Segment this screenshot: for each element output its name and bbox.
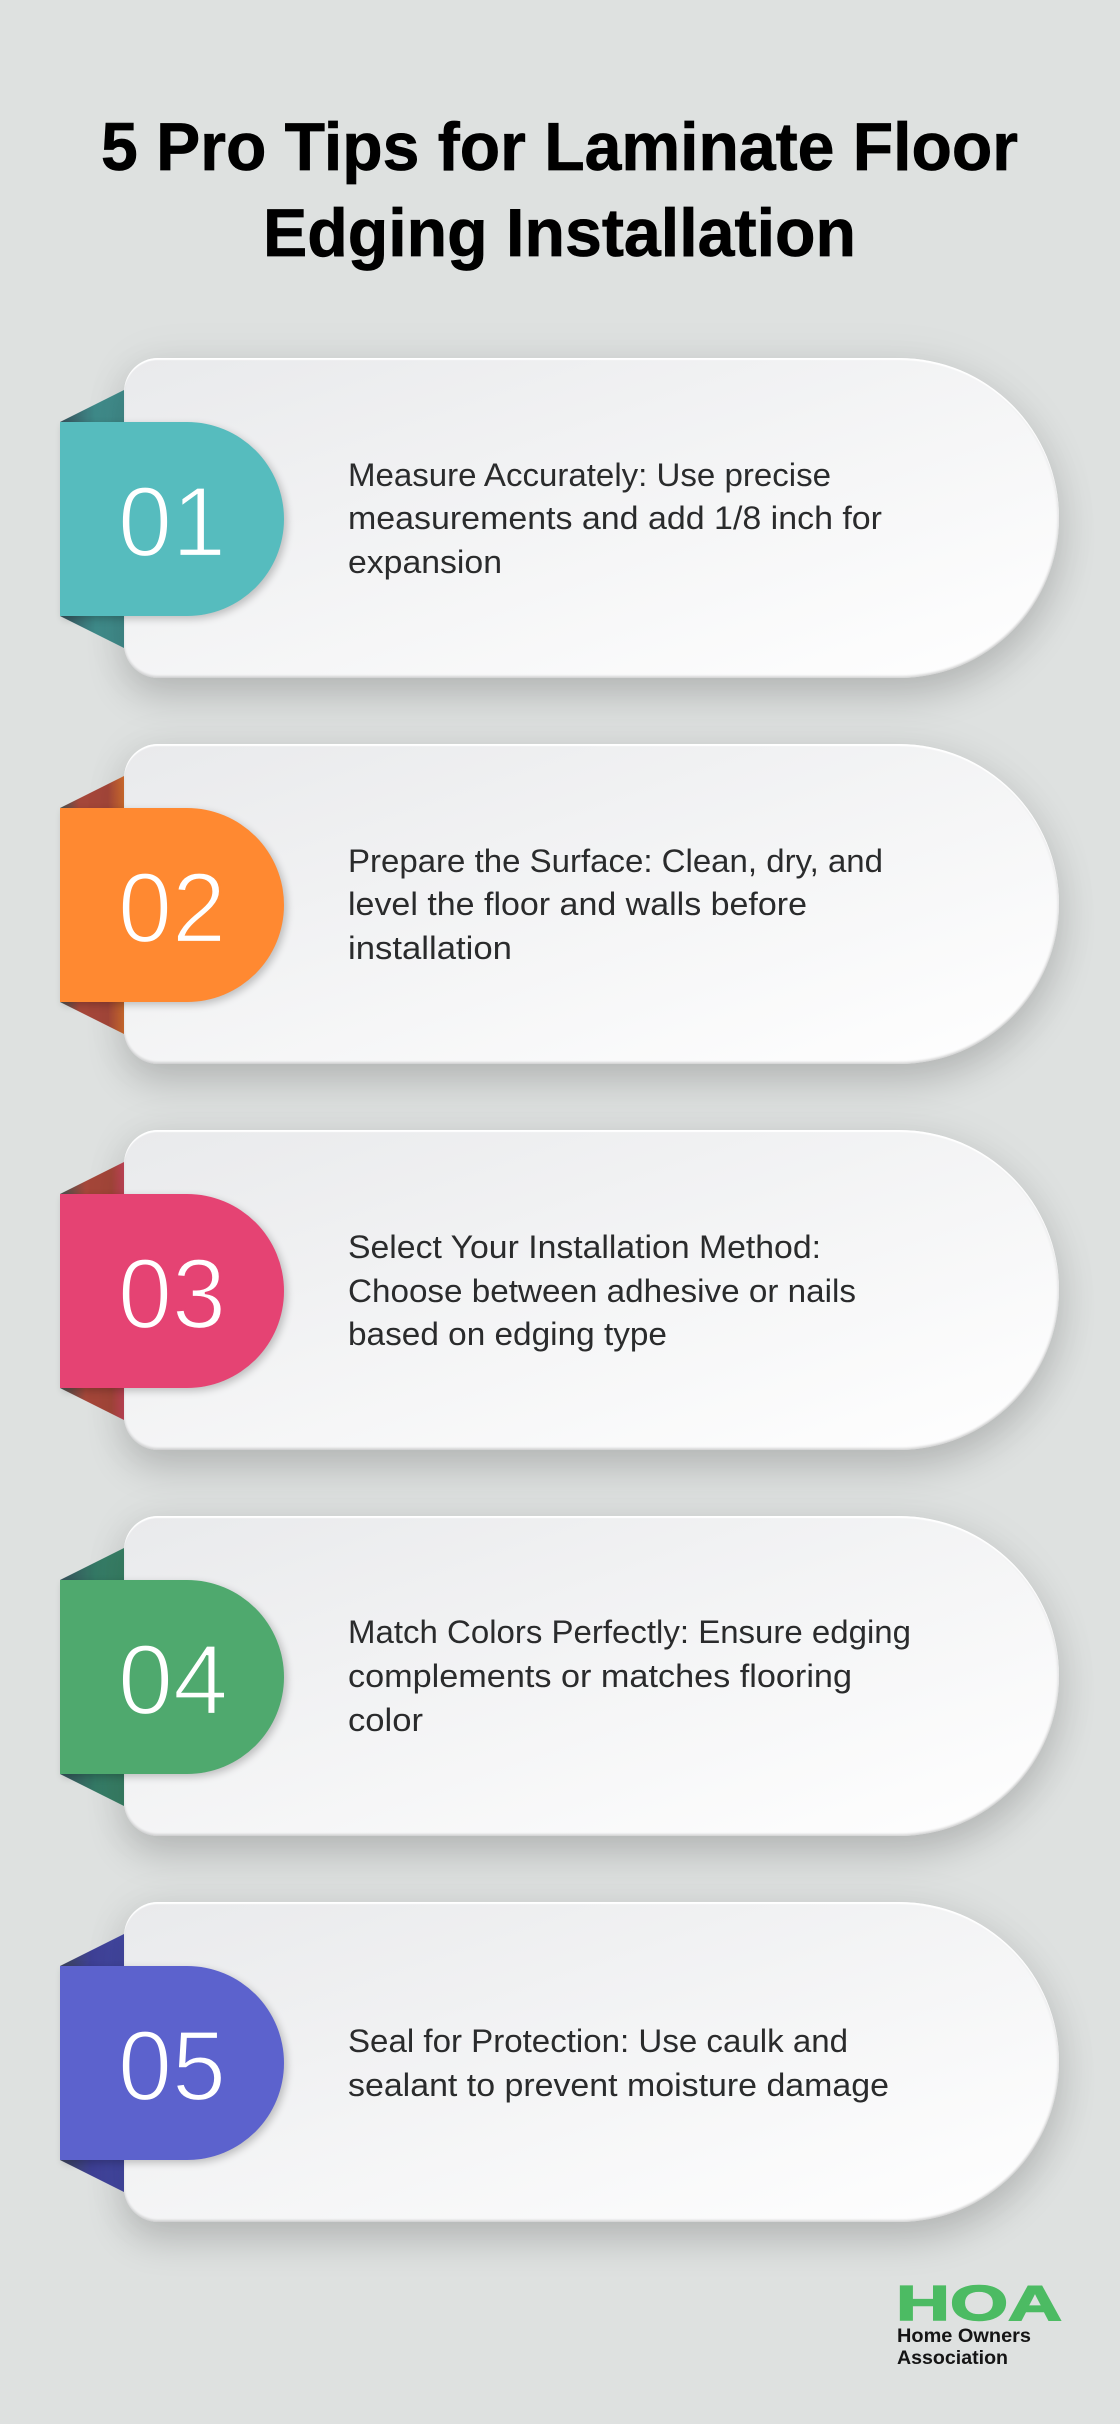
tip text: sealant to prevent moisture damage <box>348 2067 889 2103</box>
number tab <box>60 808 284 1002</box>
number 05: 05 <box>118 2010 226 2121</box>
title <box>101 109 1018 271</box>
tip text: installation <box>348 930 512 966</box>
tip text: Choose between adhesive or nails <box>348 1273 856 1309</box>
panel: tip 03 select installation method <box>60 1124 1076 1483</box>
tip text <box>348 1614 911 1738</box>
fold: pink ribbon corners <box>60 1162 124 1420</box>
tip text: Prepare the Surface: Clean, dry, and <box>348 843 883 879</box>
number tab <box>60 422 284 616</box>
card background <box>124 1516 1059 1836</box>
tip text: based on edging type <box>348 1316 667 1352</box>
number 02: 02 <box>118 852 226 963</box>
tip text: complements or matches flooring <box>348 1658 852 1694</box>
card background <box>124 1130 1059 1450</box>
panel: tip 05 seal for protection <box>60 1896 1076 2255</box>
title: Edging Installation <box>263 195 856 271</box>
tip text: level the floor and walls before <box>348 886 807 922</box>
number 03: 03 <box>118 1238 226 1349</box>
fold: orange ribbon corners <box>60 776 124 1034</box>
fold: teal ribbon corners <box>60 390 124 648</box>
tip text: Seal for Protection: Use caulk and <box>348 2023 848 2059</box>
title: 5 Pro Tips for Laminate Floor <box>101 109 1018 185</box>
tip text <box>348 1229 856 1352</box>
number tab <box>60 1966 284 2160</box>
fold: blue ribbon corners <box>60 1934 124 2192</box>
tip text: Select Your Installation Method: <box>348 1229 821 1265</box>
tip text: expansion <box>348 544 502 580</box>
tip text: Match Colors Perfectly: Ensure edging <box>348 1614 911 1650</box>
card background <box>124 744 1059 1064</box>
tip text <box>348 457 882 580</box>
tip text: color <box>348 1702 423 1738</box>
panel: tip 01 measure accurately <box>60 352 1076 711</box>
number tab <box>60 1194 284 1388</box>
number 04: 04 <box>118 1624 228 1735</box>
logo: HOA Home Owners Association: Association <box>897 2347 1008 2369</box>
number 01: 01 <box>118 466 226 577</box>
logo: HOA Home Owners Association: Home Owners <box>897 2325 1031 2347</box>
panel: tip 04 match colors <box>60 1510 1076 1869</box>
panel: tip 02 prepare the surface <box>60 738 1076 1097</box>
card background <box>124 1902 1059 2222</box>
tip text: measurements and add 1/8 inch for <box>348 500 882 536</box>
tip text <box>348 2023 889 2103</box>
fold: green ribbon corners <box>60 1548 124 1806</box>
logo: HOA Home Owners Association: HOA <box>896 2277 1062 2331</box>
card background <box>124 358 1059 678</box>
tip text: Measure Accurately: Use precise <box>348 457 831 493</box>
number tab <box>60 1580 284 1774</box>
tip text <box>348 843 883 966</box>
